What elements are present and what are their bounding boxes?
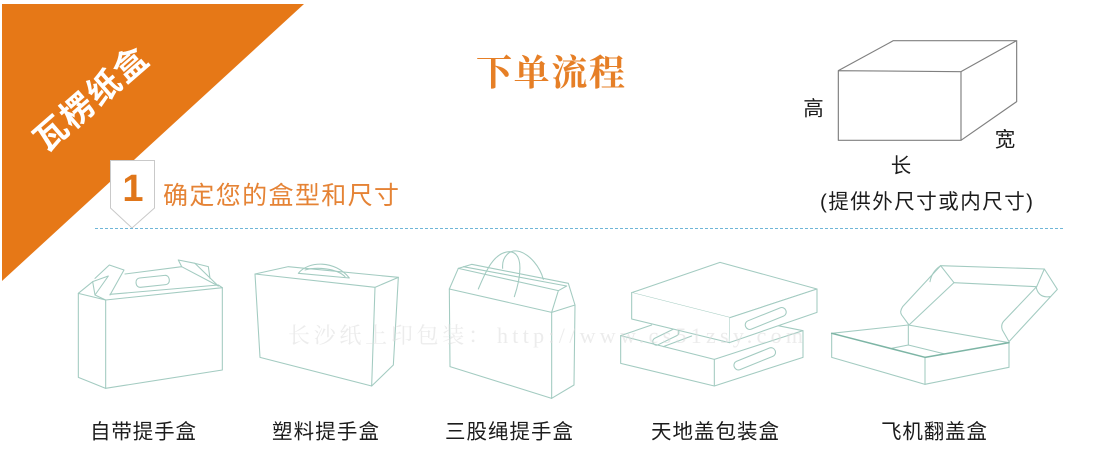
step badge xyxy=(110,160,154,228)
box 3: rope handle box xyxy=(449,251,575,398)
label: height: 高 xyxy=(803,98,824,120)
dashed divider xyxy=(95,228,1064,230)
label: box 4: 天地盖包装盒 xyxy=(651,420,779,444)
box 5: airplane flip box xyxy=(832,266,1057,384)
dimension diagram xyxy=(803,41,1033,213)
label: box 2: 塑料提手盒 xyxy=(272,420,379,444)
label: box 5: 飞机翻盖盒 xyxy=(881,420,987,444)
box 4: lid and base box xyxy=(621,262,817,386)
watermark: 长沙纸上印包装： xyxy=(288,323,490,348)
label: width: 宽 xyxy=(995,128,1015,152)
cube xyxy=(838,41,1017,140)
watermark: http://www.cs51zsy.com xyxy=(497,323,803,348)
label: length: 长 xyxy=(891,154,911,178)
step number: 1 xyxy=(122,168,144,210)
label: box 3: 三股绳提手盒 xyxy=(445,420,573,444)
title: 下单流程 xyxy=(476,53,625,93)
step heading: 确定您的盒型和尺寸 xyxy=(163,182,399,210)
label: box 1: 自带提手盒 xyxy=(90,420,196,444)
box 1: self handle box xyxy=(78,260,222,388)
orange corner banner xyxy=(2,4,304,281)
dimension note: (提供外尺寸或内尺寸) xyxy=(820,190,1033,214)
watermark xyxy=(288,323,803,348)
box 2: plastic handle box xyxy=(255,264,398,386)
banner label: 瓦楞纸盒 xyxy=(26,38,156,158)
